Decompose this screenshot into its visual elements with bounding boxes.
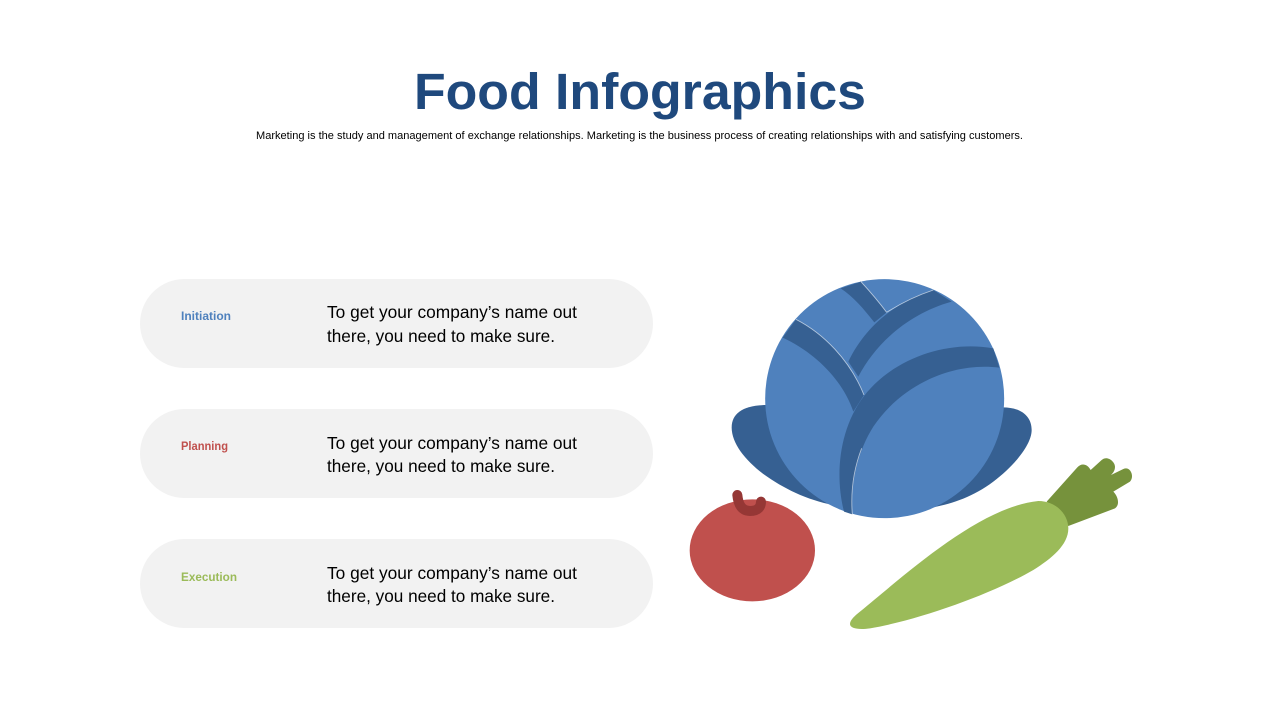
text block: initiation — [327, 302, 577, 346]
text block: execution: there, you need to make sure. — [327, 586, 555, 606]
title: Food Infographics — [414, 63, 866, 120]
subtitle: Marketing is the study and management of exchange relationships. Marketing is the business process of creating relationships with and satisfying customers. — [256, 130, 1023, 142]
icon: tomato — [690, 495, 815, 601]
panel: initiation — [140, 279, 653, 368]
text block: execution: To get your company’s name out — [327, 563, 577, 583]
cabbage head — [765, 279, 1004, 518]
text block: planning: there, you need to make sure. — [327, 456, 555, 476]
cabbage leaf bands — [783, 282, 999, 514]
icon: cabbage — [732, 279, 1032, 518]
text block: planning: To get your company’s name out — [327, 433, 577, 453]
text block: planning — [327, 433, 577, 476]
text block: initiation: To get your company’s name out — [327, 302, 577, 322]
label: initiation: Initiation — [181, 311, 231, 323]
carrot body — [850, 501, 1068, 629]
cabbage leaf highlights — [796, 282, 933, 514]
label: planning: Planning — [181, 441, 228, 453]
panel: planning — [140, 409, 653, 498]
panel: execution — [140, 539, 653, 628]
carrot leaves — [1047, 458, 1132, 526]
tomato stem — [737, 495, 761, 511]
text block: execution — [327, 563, 577, 606]
icon: carrot — [850, 458, 1132, 629]
text block: initiation: there, you need to make sure. — [327, 326, 555, 346]
label: execution: Execution — [181, 572, 237, 584]
cabbage outer leaves — [732, 405, 1032, 507]
